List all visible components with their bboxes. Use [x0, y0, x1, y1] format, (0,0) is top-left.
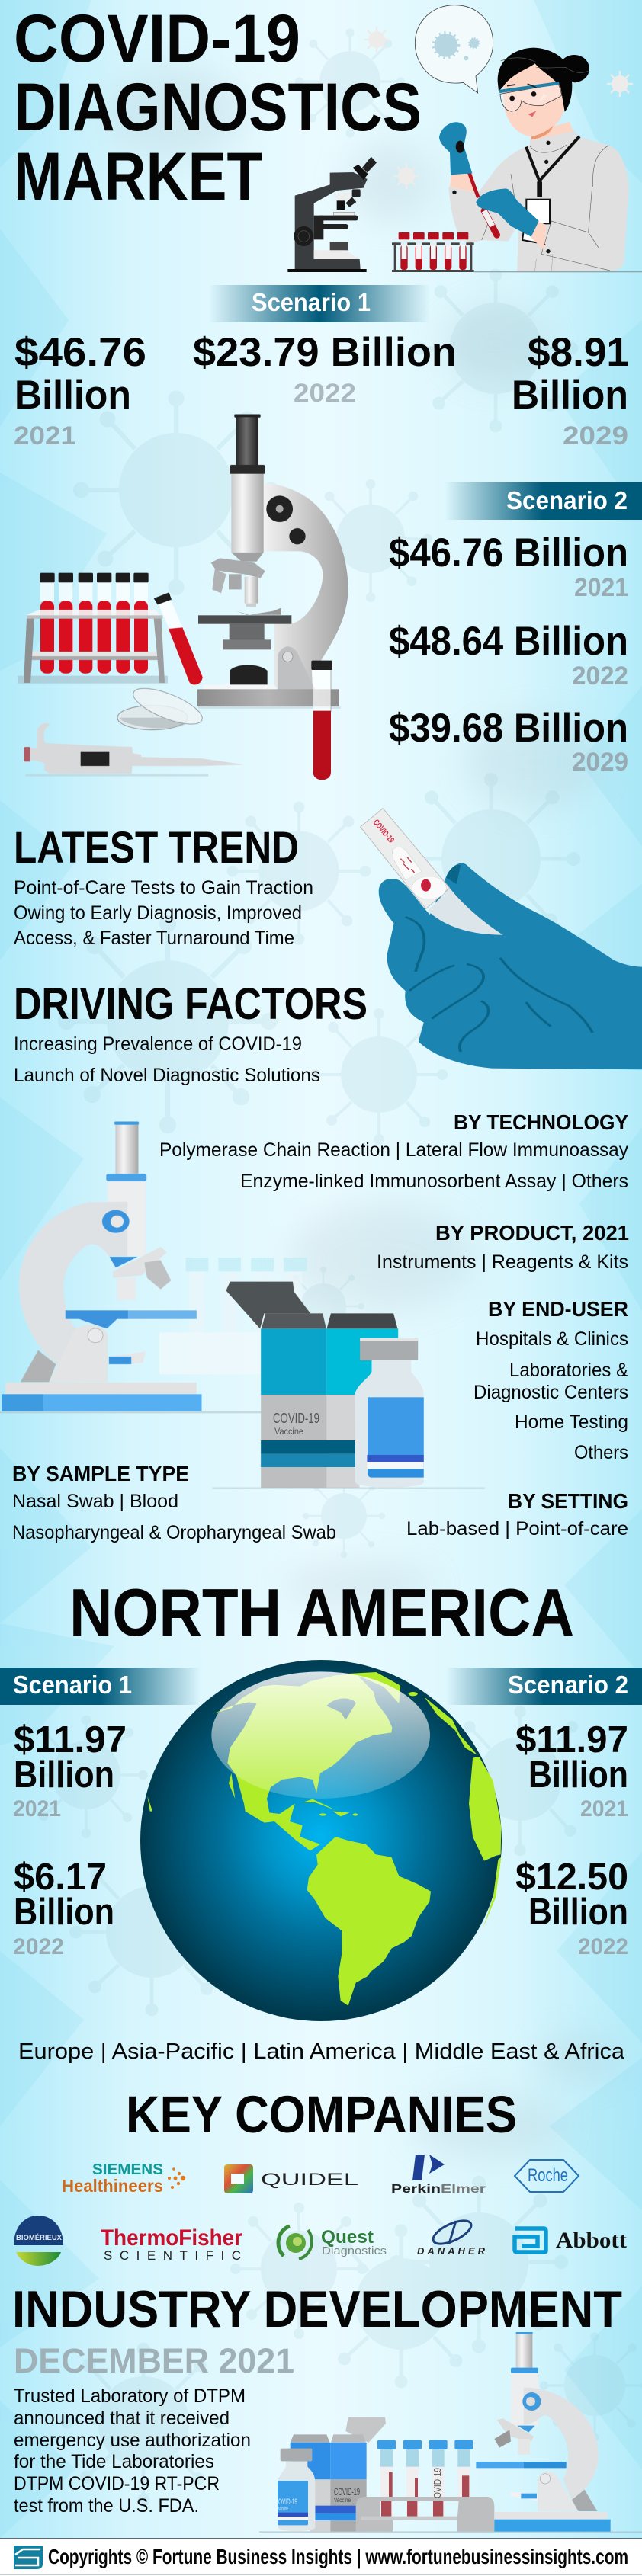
vial [278, 2449, 315, 2531]
logo: Danaher: DANAHER [417, 2245, 486, 2257]
by end-user: Laboratories & [509, 1360, 628, 1381]
scenario 1 values: $46.76 [14, 330, 146, 375]
illustration: scientist with microscope and blood samples [287, 5, 642, 272]
regional scenario 1 values: 2021 [13, 1796, 61, 1821]
box and vial label text: OVID-19 [432, 2468, 443, 2498]
box and vial label text: Vaccine [334, 2497, 351, 2504]
scenario 1 values: 2029 [563, 421, 628, 450]
speech bubble with virus [415, 5, 493, 93]
regional scenario 2 values: $12.50 [515, 1857, 628, 1898]
regional scenario 2 values: Billion [528, 1892, 628, 1933]
scenario 1 banner [209, 285, 430, 322]
dark microscope [287, 157, 377, 272]
pipette [24, 723, 244, 777]
vaccine vial [355, 1338, 424, 1488]
regional scenario 1 values: Billion [14, 1892, 114, 1933]
by product: Instruments | Reagents & Kits [377, 1251, 628, 1273]
illustration: lab equipment [259, 2332, 642, 2533]
industry development: DECEMBER 2021 [14, 2341, 294, 2380]
company logos [14, 2155, 627, 2266]
industry development: emergency use authorization [14, 2430, 251, 2451]
industry development: for the Tide Laboratories [14, 2451, 214, 2472]
logo: Thermo Fisher Scientific: SCIENTIFIC [104, 2248, 241, 2263]
title: DIAGNOSTICS [14, 69, 422, 145]
faint test tubes [159, 1258, 307, 1374]
logo: bioMérieux [14, 2216, 63, 2266]
scenario 1 values: 2021 [14, 421, 76, 450]
scenario 2 values: 2022 [572, 662, 628, 690]
by setting: BY SETTING [508, 1489, 628, 1513]
scenario 1 values: Billion [512, 373, 628, 418]
petri dish [117, 681, 207, 732]
industry development: Trusted Laboratory of DTPM [14, 2385, 246, 2407]
scenario 2 values: 2029 [572, 748, 628, 777]
industry development [12, 2280, 622, 2517]
logo: Roche: Roche [528, 2165, 568, 2186]
tall blood tube [311, 661, 332, 780]
regional scenario banners: Scenario 2 [508, 1671, 628, 1699]
by end-user: BY END-USER [488, 1297, 628, 1321]
by technology: Polymerase Chain Reaction | Lateral Flow Immunoassay [159, 1139, 628, 1161]
illustration: white microscope and vaccine [0, 1122, 485, 1489]
logo: Abbott [515, 2228, 627, 2253]
latest trend: LATEST TREND [14, 823, 299, 873]
logo: bioMérieux: BIOMÉRIEUX [16, 2234, 62, 2241]
logo: PerkinElmer: Perkin Elmer [391, 2183, 486, 2196]
scenario 1 values: $23.79 Billion [193, 330, 457, 375]
scenario 2 values: $39.68 Billion [389, 706, 628, 751]
north america heading: NORTH AMERICA [69, 1575, 574, 1650]
industry development: DTPM COVID-19 RT-PCR [14, 2473, 220, 2494]
by product: BY PRODUCT, 2021 [435, 1221, 629, 1245]
latest trend: Access, & Faster Turnaround Time [14, 928, 294, 949]
logo: Quidel [224, 2164, 358, 2193]
scenario 1 values: Billion [14, 373, 131, 418]
regional scenario 2 values: 2022 [578, 1934, 628, 1959]
box and vial label text: COVID-19 [334, 2485, 360, 2498]
logo: Quidel: QUIDEL [261, 2170, 358, 2189]
logo: Quest Diagnostics: Quest [321, 2227, 374, 2248]
by technology: BY TECHNOLOGY [454, 1110, 628, 1134]
regional scenario 1 values: Billion [14, 1754, 114, 1796]
regional scenario 2 values: Billion [528, 1754, 628, 1796]
logo: Siemens Healthineers: SIEMENS [92, 2161, 163, 2178]
industry development: test from the U.S. FDA. [14, 2495, 199, 2517]
box and vial label text: Vaccine [278, 2507, 288, 2512]
latest trend: Point-of-Care Tests to Gain Traction [14, 877, 313, 899]
vaccine label text [273, 1411, 319, 1437]
by end-user [473, 1297, 628, 1463]
regional scenario 1 values: $6.17 [14, 1857, 107, 1898]
by technology: Enzyme-linked Immunosorbent Assay | Others [240, 1171, 628, 1192]
by sample type [12, 1462, 336, 1543]
by sample type: BY SAMPLE TYPE [12, 1462, 189, 1485]
regional scenario banners [0, 1668, 642, 1705]
by product [377, 1221, 629, 1273]
leaning test tube [154, 592, 203, 684]
by end-user: Home Testing [515, 1411, 628, 1433]
scenario 1 values: 2022 [294, 379, 356, 408]
logo: Siemens Healthineers: Healthineers [62, 2176, 163, 2196]
scenario 2 values: 2021 [574, 573, 628, 602]
by end-user: Hospitals & Clinics [476, 1328, 628, 1350]
scenario 2 banner: Scenario 2 [506, 486, 628, 514]
driving factors: Increasing Prevalence of COVID-19 [14, 1033, 302, 1055]
logo: Fortune Business Insights [14, 2546, 43, 2569]
industry development: announced that it received [14, 2408, 230, 2429]
by end-user: Others [574, 1442, 628, 1463]
scenario 1 banner: Scenario 1 [252, 288, 371, 316]
by sample type: Nasopharyngeal & Oropharyngeal Swab [12, 1522, 336, 1543]
by end-user: Diagnostic Centers [473, 1382, 628, 1403]
latest trend [14, 823, 313, 949]
by setting [406, 1489, 628, 1540]
box and vial label text [278, 2468, 443, 2512]
logo: Siemens Healthineers [62, 2161, 185, 2196]
vaccine label text: COVID-19 [273, 1411, 319, 1426]
other regions: Europe | Asia-Pacific | Latin America | Middle East & Africa [18, 2039, 625, 2064]
logo: Roche [515, 2160, 579, 2192]
driving factors [14, 979, 368, 1086]
logo: Quest Diagnostics [278, 2226, 387, 2259]
by sample type: Nasal Swab | Blood [12, 1491, 178, 1512]
scenario 2 banner [445, 482, 642, 520]
title [14, 0, 422, 214]
by setting: Lab-based | Point-of-care [406, 1518, 628, 1540]
latest trend: Owing to Early Diagnosis, Improved [14, 902, 302, 924]
title: MARKET [14, 138, 262, 214]
logo: Thermo Fisher Scientific [101, 2225, 242, 2263]
test card [361, 809, 450, 909]
box [291, 2417, 386, 2532]
blood sample rack [392, 232, 474, 272]
regional scenario 1 values: 2022 [13, 1934, 64, 1959]
scenario 1 values: $8.91 [528, 330, 629, 375]
driving factors: DRIVING FACTORS [14, 979, 368, 1029]
footer [0, 2538, 642, 2576]
regional scenario 2 values: 2021 [580, 1796, 628, 1821]
scenario 2 values: $46.76 Billion [389, 530, 628, 575]
vaccine label text: Vaccine [274, 1426, 303, 1437]
tubes [356, 2440, 494, 2532]
regional scenario 2 values: $11.97 [515, 1719, 628, 1761]
microscope [0, 1122, 262, 1413]
scenario 2 values: $48.64 Billion [389, 619, 628, 664]
scenario 1 values [14, 330, 629, 450]
scenario 2 values [389, 530, 628, 777]
logo: Thermo Fisher Scientific: ThermoFisher [101, 2225, 242, 2251]
regional scenario banners: Scenario 1 [13, 1671, 132, 1699]
title: COVID-19 [14, 0, 300, 76]
logo: Abbott: Abbott [556, 2228, 627, 2253]
regional scenario 2 values [515, 1719, 628, 1959]
illustration: large microscope and lab equipment [18, 414, 348, 780]
logo: Quest Diagnostics: Diagnostics [322, 2244, 387, 2257]
regional scenario 1 values [13, 1719, 127, 1959]
key companies heading: KEY COMPANIES [126, 2085, 517, 2144]
vaccine box [213, 1282, 485, 1489]
logo: Danaher [417, 2216, 486, 2257]
logo: PerkinElmer [391, 2155, 486, 2196]
scientist [439, 48, 629, 271]
illustration: gloved hand holding test card: COVID-19 [371, 818, 396, 845]
globe [140, 1660, 502, 2021]
driving factors: Launch of Novel Diagnostic Solutions [14, 1065, 320, 1086]
illustration: gloved hand holding test card [361, 809, 642, 1069]
box and vial label text: OVID-19 [278, 2498, 297, 2507]
microscope [476, 2332, 611, 2532]
glove [379, 863, 642, 1069]
microscope [197, 414, 348, 709]
regional scenario 1 values: $11.97 [14, 1719, 127, 1761]
test tube rack [18, 573, 168, 684]
by technology [159, 1110, 628, 1192]
